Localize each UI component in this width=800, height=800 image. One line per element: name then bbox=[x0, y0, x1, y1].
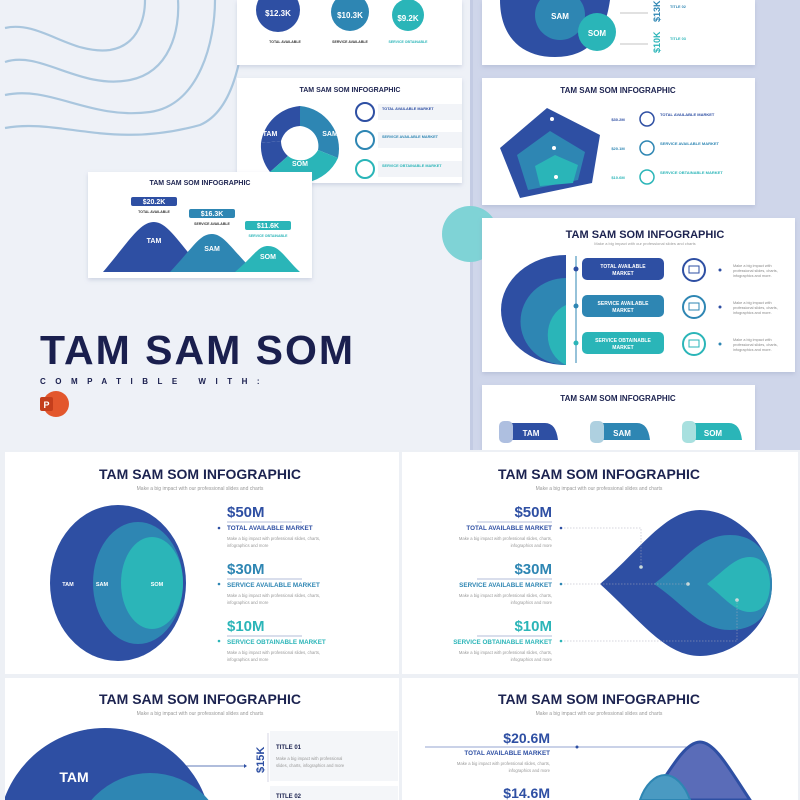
panel: nested ellipses: TOTAL AVAILABLE MARKET bbox=[227, 525, 313, 532]
slide thumbnail: donut: TAM SAM SOM INFOGRAPHIC bbox=[300, 87, 400, 94]
panel: drop shape: $50M bbox=[514, 504, 552, 521]
panel: drop shape: Make a big impact with our professional slides and charts bbox=[536, 486, 663, 492]
panel: drop shape bbox=[402, 452, 798, 674]
slide thumbnail: mountains: SERVICE OBTAINABLE bbox=[249, 234, 288, 238]
right slide: half circles with labels: infographics and more. bbox=[733, 348, 772, 352]
right slide: nested circles with titles: SOM bbox=[588, 29, 606, 38]
right slide: half circles with labels bbox=[482, 218, 795, 372]
slide thumbnail: mountains: $11.6K bbox=[257, 223, 279, 230]
right slide: nested circles with titles: TITLE 02 bbox=[670, 5, 686, 9]
right slide: half circles with labels: SERVICE AVAILABLE bbox=[598, 301, 649, 307]
slide thumbnail: mountains: TAM SAM SOM INFOGRAPHIC bbox=[150, 180, 250, 187]
main title: TAM SAM SOM bbox=[40, 327, 355, 373]
right slide: half circles with labels: MARKET bbox=[612, 345, 634, 351]
right slide: pentagon: $20.1M bbox=[611, 146, 625, 151]
right slide: nested circles with titles: TITLE 03 bbox=[670, 37, 686, 41]
panel: drop shape: Make a big impact with professional slides, charts, bbox=[459, 536, 552, 541]
slide thumbnail: donut: SOM bbox=[292, 161, 308, 168]
panel: drop shape: TAM SAM SOM INFOGRAPHIC bbox=[498, 466, 700, 482]
panel: nested ellipses: infographics and more bbox=[227, 543, 269, 548]
right slide: nested circles with titles: SAM bbox=[551, 12, 569, 21]
panel: nested ellipses: SERVICE AVAILABLE MARKET bbox=[227, 582, 320, 589]
panel: nested ellipses: Make a big impact with our professional slides and charts bbox=[137, 486, 264, 492]
right slide: nested circles with titles: $13K bbox=[652, 0, 662, 22]
background: top left bbox=[0, 0, 472, 450]
slide thumbnail: donut: SERVICE AVAILABLE MARKET bbox=[382, 135, 439, 139]
panel: mountains with values: Make a big impact with professional slides, charts, bbox=[457, 761, 550, 766]
panel: nested ellipses: Make a big impact with professional slides, charts, bbox=[227, 593, 320, 598]
subtitle: compatible with: COMPATIBLE WITH: bbox=[40, 377, 269, 386]
panel: circles with titles: TAM bbox=[59, 769, 89, 785]
panel: mountains with values: $20.6M bbox=[503, 730, 550, 746]
right slide: nested circles with titles: $10K bbox=[652, 31, 662, 53]
icon: powerpoint: P bbox=[43, 400, 50, 410]
panel: mountains with values: infographics and more bbox=[509, 768, 551, 773]
panel: drop shape: $30M bbox=[514, 561, 552, 578]
panel: drop shape: SERVICE OBTAINABLE MARKET bbox=[453, 639, 552, 646]
slide thumbnail: circles bbox=[237, 0, 462, 65]
right slide: half circles with labels: Make a big impact with our professional slides and charts bbox=[594, 241, 696, 246]
panel: nested ellipses: Make a big impact with professional slides, charts, bbox=[227, 536, 320, 541]
panel: drop shape: Make a big impact with professional slides, charts, bbox=[459, 650, 552, 655]
panel: drop shape: SERVICE AVAILABLE MARKET bbox=[459, 582, 552, 589]
panel: nested ellipses: $50M bbox=[227, 504, 265, 521]
right slide: pentagon: SERVICE OBTAINABLE MARKET bbox=[660, 170, 723, 175]
panel: nested ellipses: $10M bbox=[227, 618, 265, 635]
slide thumbnail: donut: TAM bbox=[263, 131, 277, 138]
panel: nested ellipses: $30M bbox=[227, 561, 265, 578]
panel: drop shape: Make a big impact with professional slides, charts, bbox=[459, 593, 552, 598]
panel: circles with titles bbox=[0, 678, 399, 800]
right slide: half circles with labels: TOTAL AVAILABLE bbox=[600, 264, 646, 270]
panel: drop shape: $10M bbox=[514, 618, 552, 635]
slide thumbnail: circles: $12.3K bbox=[265, 9, 291, 18]
icon: powerpoint bbox=[40, 391, 69, 417]
slide thumbnail: donut bbox=[237, 78, 462, 183]
right slide: half circles with labels: SERVICE OBTAINABLE bbox=[595, 338, 651, 344]
panel: circles with titles: TITLE 01 bbox=[276, 745, 302, 751]
right slide: half circles with labels: MARKET bbox=[612, 308, 634, 314]
panel: drop shape: infographics and more bbox=[511, 657, 553, 662]
panel: circles with titles: $15K bbox=[255, 747, 267, 773]
right slide: half circles with labels: professional slides, charts, bbox=[733, 306, 778, 310]
right slide: half circles with labels: Make a big impact with bbox=[733, 301, 772, 305]
panel: nested ellipses: Make a big impact with professional slides, charts, bbox=[227, 650, 320, 655]
slide thumbnail: mountains: SAM bbox=[204, 246, 220, 253]
right slide: half circles with labels: professional slides, charts, bbox=[733, 343, 778, 347]
panel: mountains with values: TOTAL AVAILABLE MARKET bbox=[464, 750, 550, 757]
right slide: half circles with labels: Make a big impact with bbox=[733, 264, 772, 268]
right slide: pentagon: TOTAL AVAILABLE MARKET bbox=[660, 112, 715, 117]
right slide: half circles with labels: MARKET bbox=[612, 271, 634, 277]
right slide: half circles with labels: TAM SAM SOM INFOGRAPHIC bbox=[566, 229, 724, 241]
panel: drop shape: infographics and more bbox=[511, 600, 553, 605]
slide thumbnail: mountains: TAM bbox=[147, 238, 161, 245]
right slide: tabs: SOM bbox=[704, 429, 722, 438]
panel: drop shape: infographics and more bbox=[511, 543, 553, 548]
slide thumbnail: circles: TOTAL AVAILABLE bbox=[269, 40, 301, 44]
right slide: tabs: TAM bbox=[523, 429, 540, 438]
slide thumbnail: mountains: TOTAL AVAILABLE bbox=[138, 210, 170, 214]
slide thumbnail: mountains: SERVICE AVAILABLE bbox=[194, 222, 230, 226]
panel: mountains with values: TAM SAM SOM INFOGRAPHIC bbox=[498, 691, 700, 707]
slide thumbnail: donut: SERVICE OBTAINABLE MARKET bbox=[382, 164, 442, 168]
slide thumbnail: circles: SERVICE OBTAINABLE bbox=[389, 40, 428, 44]
right slide: half circles with labels: professional slides, charts, bbox=[733, 269, 778, 273]
panel: nested ellipses: TAM bbox=[62, 582, 74, 588]
right slide: tabs: TAM SAM SOM INFOGRAPHIC bbox=[560, 394, 676, 403]
right slide: half circles with labels: Make a big impact with bbox=[733, 338, 772, 342]
panel: circles with titles: TITLE 02 bbox=[276, 794, 302, 800]
slide thumbnail: mountains: SOM bbox=[260, 254, 276, 261]
panel: nested ellipses: infographics and more bbox=[227, 657, 269, 662]
background: top right column bbox=[472, 0, 800, 450]
panel: mountains with values: Make a big impact with our professional slides and charts bbox=[536, 711, 663, 717]
slide thumbnail: circles: SERVICE AVAILABLE bbox=[332, 40, 368, 44]
panel: circles with titles: Make a big impact with our professional slides and charts bbox=[137, 711, 264, 717]
right slide: pentagon bbox=[482, 78, 755, 205]
right slide: nested circles with titles bbox=[482, 0, 755, 65]
bottom gap background bbox=[482, 450, 756, 452]
panel: drop shape: TOTAL AVAILABLE MARKET bbox=[466, 525, 552, 532]
panel: nested ellipses: TAM SAM SOM INFOGRAPHIC bbox=[99, 466, 301, 482]
panel: nested ellipses: SOM bbox=[151, 582, 164, 588]
slide thumbnail: donut: SAM bbox=[322, 131, 338, 138]
panel: nested ellipses: SAM bbox=[96, 582, 109, 588]
right slide: pentagon: TAM SAM SOM INFOGRAPHIC bbox=[560, 86, 676, 95]
panel: nested ellipses: infographics and more bbox=[227, 600, 269, 605]
decorative swirl lines bbox=[5, 0, 245, 135]
slide thumbnail: mountains: $20.2K bbox=[143, 199, 165, 206]
right slide: tabs: SAM bbox=[613, 429, 631, 438]
right slide: pentagon: $10.6M bbox=[611, 175, 625, 180]
right slide: pentagon: SERVICE AVAILABLE MARKET bbox=[660, 141, 720, 146]
teal circle decoration bbox=[442, 206, 498, 262]
slide thumbnail: mountains: $16.3K bbox=[201, 211, 223, 218]
panel: nested ellipses: SERVICE OBTAINABLE MARKET bbox=[227, 639, 326, 646]
right slide: half circles with labels: infographics and more. bbox=[733, 274, 772, 278]
panel: circles with titles: slides, charts, infographics and more bbox=[276, 763, 345, 768]
panel: circles with titles: Make a big impact with professional bbox=[276, 756, 342, 761]
slide thumbnail: mountains bbox=[88, 172, 312, 278]
slide thumbnail: circles: $10.3K bbox=[337, 11, 363, 20]
slide thumbnail: circles: $9.2K bbox=[397, 14, 419, 23]
right slide: pentagon: $30.2M bbox=[611, 117, 625, 122]
slide thumbnail: donut: TOTAL AVAILABLE MARKET bbox=[382, 107, 434, 111]
panel: mountains with values bbox=[402, 678, 798, 800]
right slide: half circles with labels: infographics and more. bbox=[733, 311, 772, 315]
panel: nested ellipses bbox=[5, 452, 399, 674]
panel: circles with titles: TAM SAM SOM INFOGRAPHIC bbox=[99, 691, 301, 707]
right slide: tabs bbox=[482, 385, 755, 450]
